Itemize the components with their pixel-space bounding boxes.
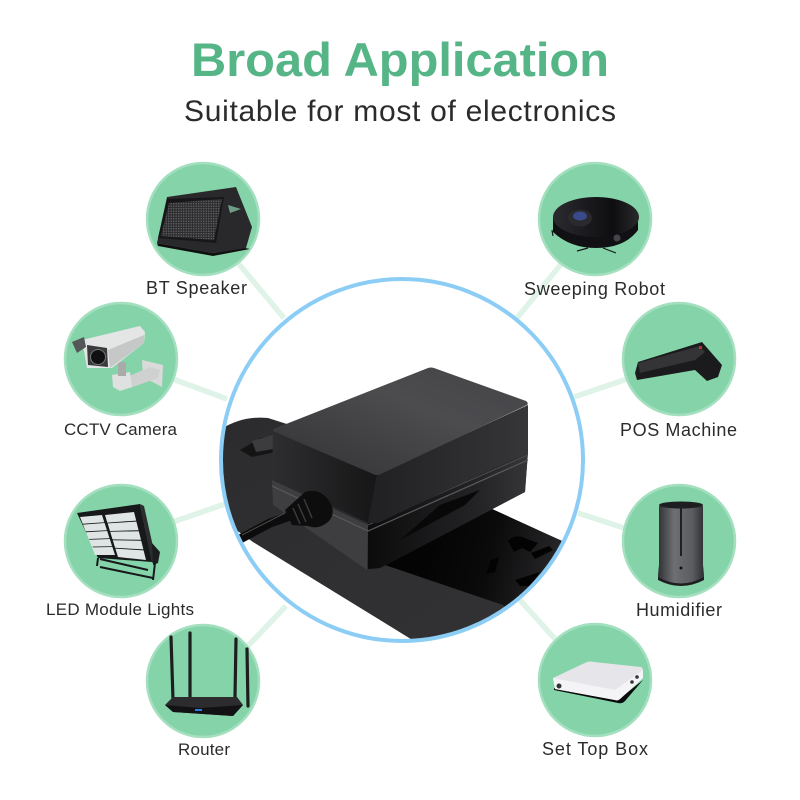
shadow under adapter xyxy=(386,509,562,606)
strain relief xyxy=(285,491,333,527)
circle: LED Module Lights xyxy=(65,485,177,597)
connector lines xyxy=(173,263,627,648)
icon: speaker xyxy=(157,187,252,256)
circle: CCTV Camera xyxy=(65,303,177,415)
circle: Set Top Box xyxy=(539,624,651,736)
subtitle: Suitable for most of electronics xyxy=(184,95,616,128)
adapter right face xyxy=(368,405,528,523)
label: Sweeping Robot: Sweeping Robot xyxy=(524,279,665,299)
circle: BT Speaker xyxy=(147,163,259,275)
icon: humidifier xyxy=(658,502,704,586)
label: Set Top Box: Set Top Box xyxy=(542,739,648,759)
title: Broad Application xyxy=(191,33,609,86)
label: POS Machine: POS Machine xyxy=(620,420,737,440)
label: CCTV Camera: CCTV Camera xyxy=(64,420,178,439)
label: LED Module Lights: LED Module Lights xyxy=(46,600,194,619)
power cord xyxy=(240,516,290,539)
icon: camera xyxy=(72,326,163,391)
icon: robot vacuum xyxy=(552,197,639,253)
strip switch xyxy=(240,438,272,457)
adapter left face xyxy=(272,432,377,523)
circle: Sweeping Robot xyxy=(539,163,651,275)
adapter top face xyxy=(273,368,528,475)
icon: LED flood light xyxy=(77,504,160,580)
circle: Router xyxy=(147,625,259,737)
power strip xyxy=(223,418,562,639)
icon: set top box xyxy=(553,662,643,703)
icon: router xyxy=(165,633,248,716)
central circle: power adapter on strip xyxy=(215,279,600,660)
circle: POS Machine xyxy=(623,303,735,415)
label: BT Speaker: BT Speaker xyxy=(146,278,247,298)
circle: Humidifier xyxy=(623,485,735,597)
icon: POS terminal xyxy=(635,342,722,381)
adapter lower shell xyxy=(386,452,528,565)
socket holes xyxy=(486,536,553,586)
label: Humidifier: Humidifier xyxy=(636,600,722,620)
label: Router: Router xyxy=(178,740,230,759)
